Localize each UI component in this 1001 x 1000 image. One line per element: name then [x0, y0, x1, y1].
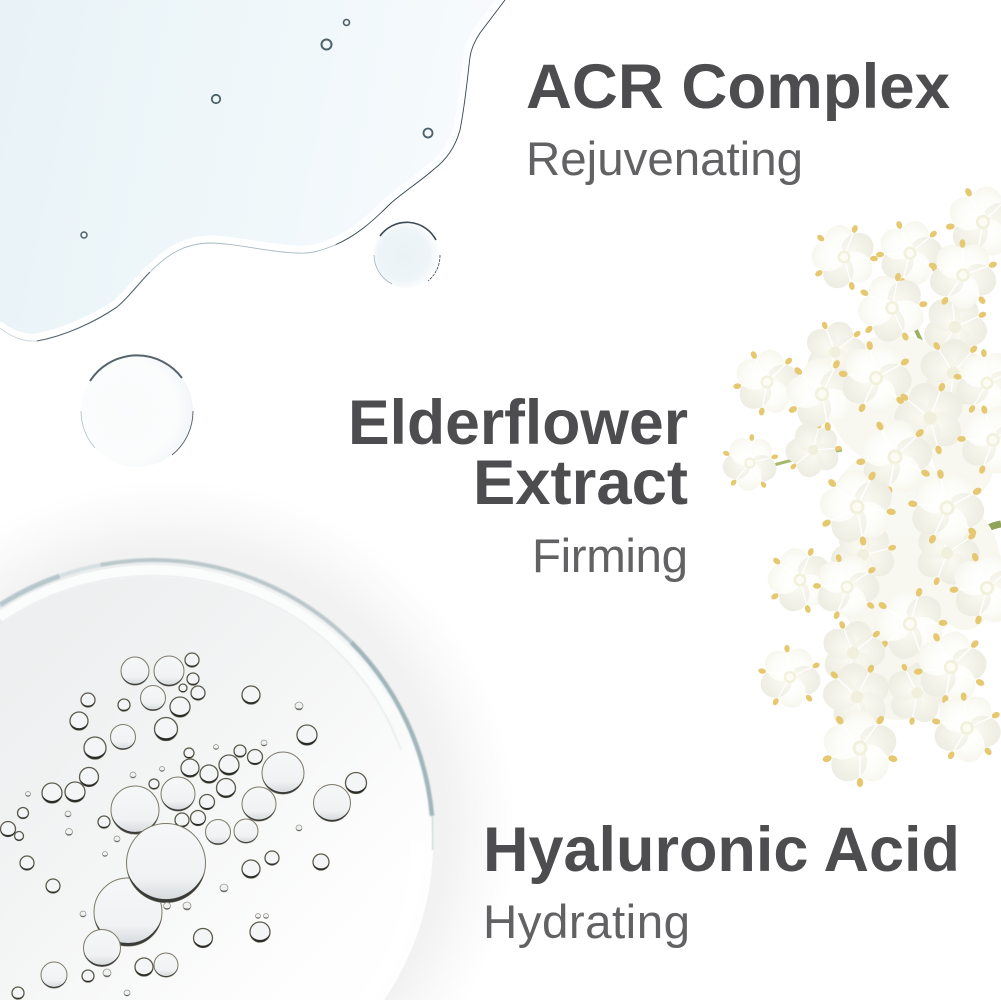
- heading: ACR Complex: ACR Complex: [526, 52, 950, 122]
- water droplet large: [81, 355, 193, 467]
- elderflower cluster: [708, 180, 1001, 788]
- petri dish: [0, 560, 433, 1000]
- heading: Elderflower Extract: Extract: [473, 448, 688, 518]
- subheading: Rejuvenating: Rejuvenating: [526, 133, 803, 186]
- oil bubbles in dish: [0, 653, 366, 999]
- water droplet small: [374, 222, 440, 288]
- heading: Elderflower Extract: [348, 388, 688, 518]
- heading: Elderflower Extract: Elderflower: [348, 388, 688, 458]
- subheading: Hydrating: Hydrating: [483, 896, 690, 949]
- heading: Hyaluronic Acid: Hyaluronic Acid: [483, 815, 960, 885]
- subheading: Firming: Firming: [532, 530, 688, 583]
- petri dish soft shadow: [0, 470, 530, 1000]
- water splash: liquid serum blob: [0, 0, 505, 341]
